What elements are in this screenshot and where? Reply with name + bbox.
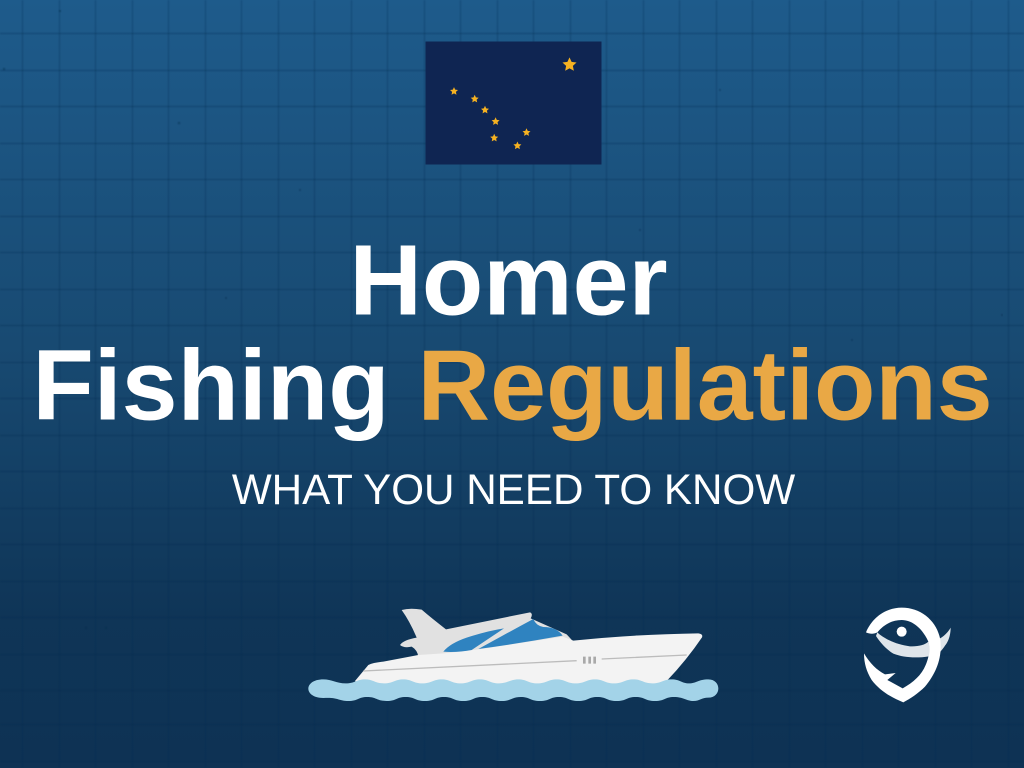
title: Fishing Regulations: Fishing Regulations <box>32 329 993 441</box>
logo eye <box>897 627 907 637</box>
icon: boat on water <box>308 609 718 701</box>
boat vents <box>584 657 595 664</box>
boat flybridge fin <box>400 609 573 657</box>
icon: Big Dipper stars <box>450 87 530 149</box>
logo tail <box>939 628 951 653</box>
logo body, head ring and hook <box>864 608 941 702</box>
icon: fish logo <box>864 608 951 702</box>
water waves <box>308 679 718 701</box>
boat hull stripe <box>363 655 687 671</box>
subtitle: WHAT YOU NEED TO KNOW <box>232 466 795 513</box>
icon: North Star <box>562 57 577 71</box>
title: Homer: Homer <box>349 224 668 336</box>
boat blue windows <box>443 619 563 652</box>
icon: Alaska flag <box>426 42 602 164</box>
logo gray band <box>876 632 930 657</box>
boat hull <box>355 633 702 692</box>
